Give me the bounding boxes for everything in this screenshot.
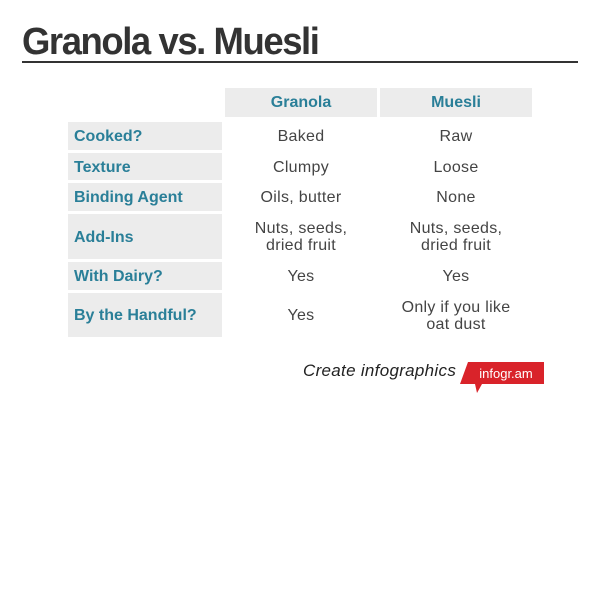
row label: With Dairy: [68, 262, 222, 290]
value: granola add-ins: [255, 220, 347, 254]
row label: By the Handful: [68, 293, 222, 337]
title: Granola vs. Muesli: [22, 21, 318, 63]
row label: Cooked: [68, 122, 222, 150]
title underline: [22, 61, 578, 63]
row label: Binding Agent: Binding Agent: [74, 189, 183, 206]
row label: With Dairy: With Dairy?: [74, 268, 163, 285]
value: granola add-ins: dried fruit: [266, 237, 336, 254]
value: granola add-ins: Nuts, seeds,: [255, 220, 347, 237]
value: oat dust: Only if you like: [402, 298, 510, 316]
value: None: None: [436, 189, 476, 206]
header: Granola: Granola: [271, 94, 331, 111]
value: oat dust: [402, 298, 510, 332]
value: muesli add-ins: dried fruit: [421, 237, 491, 254]
row label: Texture: [68, 153, 222, 180]
header: Granola: [225, 88, 377, 117]
header: Muesli: [380, 88, 532, 117]
row label: Texture: Texture: [74, 158, 131, 176]
value: oat dust: oat dust: [426, 316, 486, 332]
value: Yes: Yes: [442, 268, 470, 285]
value: Clumpy: Clumpy: [273, 158, 329, 176]
icon: infogr.am badge: infogr.am: [479, 366, 533, 381]
icon: infogr.am badge: [460, 362, 544, 393]
row label: Add-Ins: Add-Ins: [74, 228, 134, 246]
value: Oils, butter: Oils, butter: [261, 189, 341, 206]
value: Yes: Yes: [287, 307, 314, 324]
row label: Add-Ins: [68, 214, 222, 259]
value: Baked: Baked: [278, 128, 324, 145]
credit logo: [303, 361, 544, 393]
credit text: Create infographics: [303, 361, 456, 380]
header: Muesli: Muesli: [431, 94, 481, 111]
table: [68, 88, 532, 337]
value: Raw: Raw: [440, 128, 472, 145]
value: Loose: Loose: [433, 158, 479, 176]
value: muesli add-ins: Nuts, seeds,: [410, 220, 502, 237]
row label: Binding Agent: [68, 183, 222, 211]
row label: Cooked: Cooked?: [74, 128, 142, 145]
row label: By the Handful: By the Handful?: [74, 307, 197, 324]
value: muesli add-ins: [410, 220, 502, 254]
value: Yes: Yes: [287, 268, 314, 285]
